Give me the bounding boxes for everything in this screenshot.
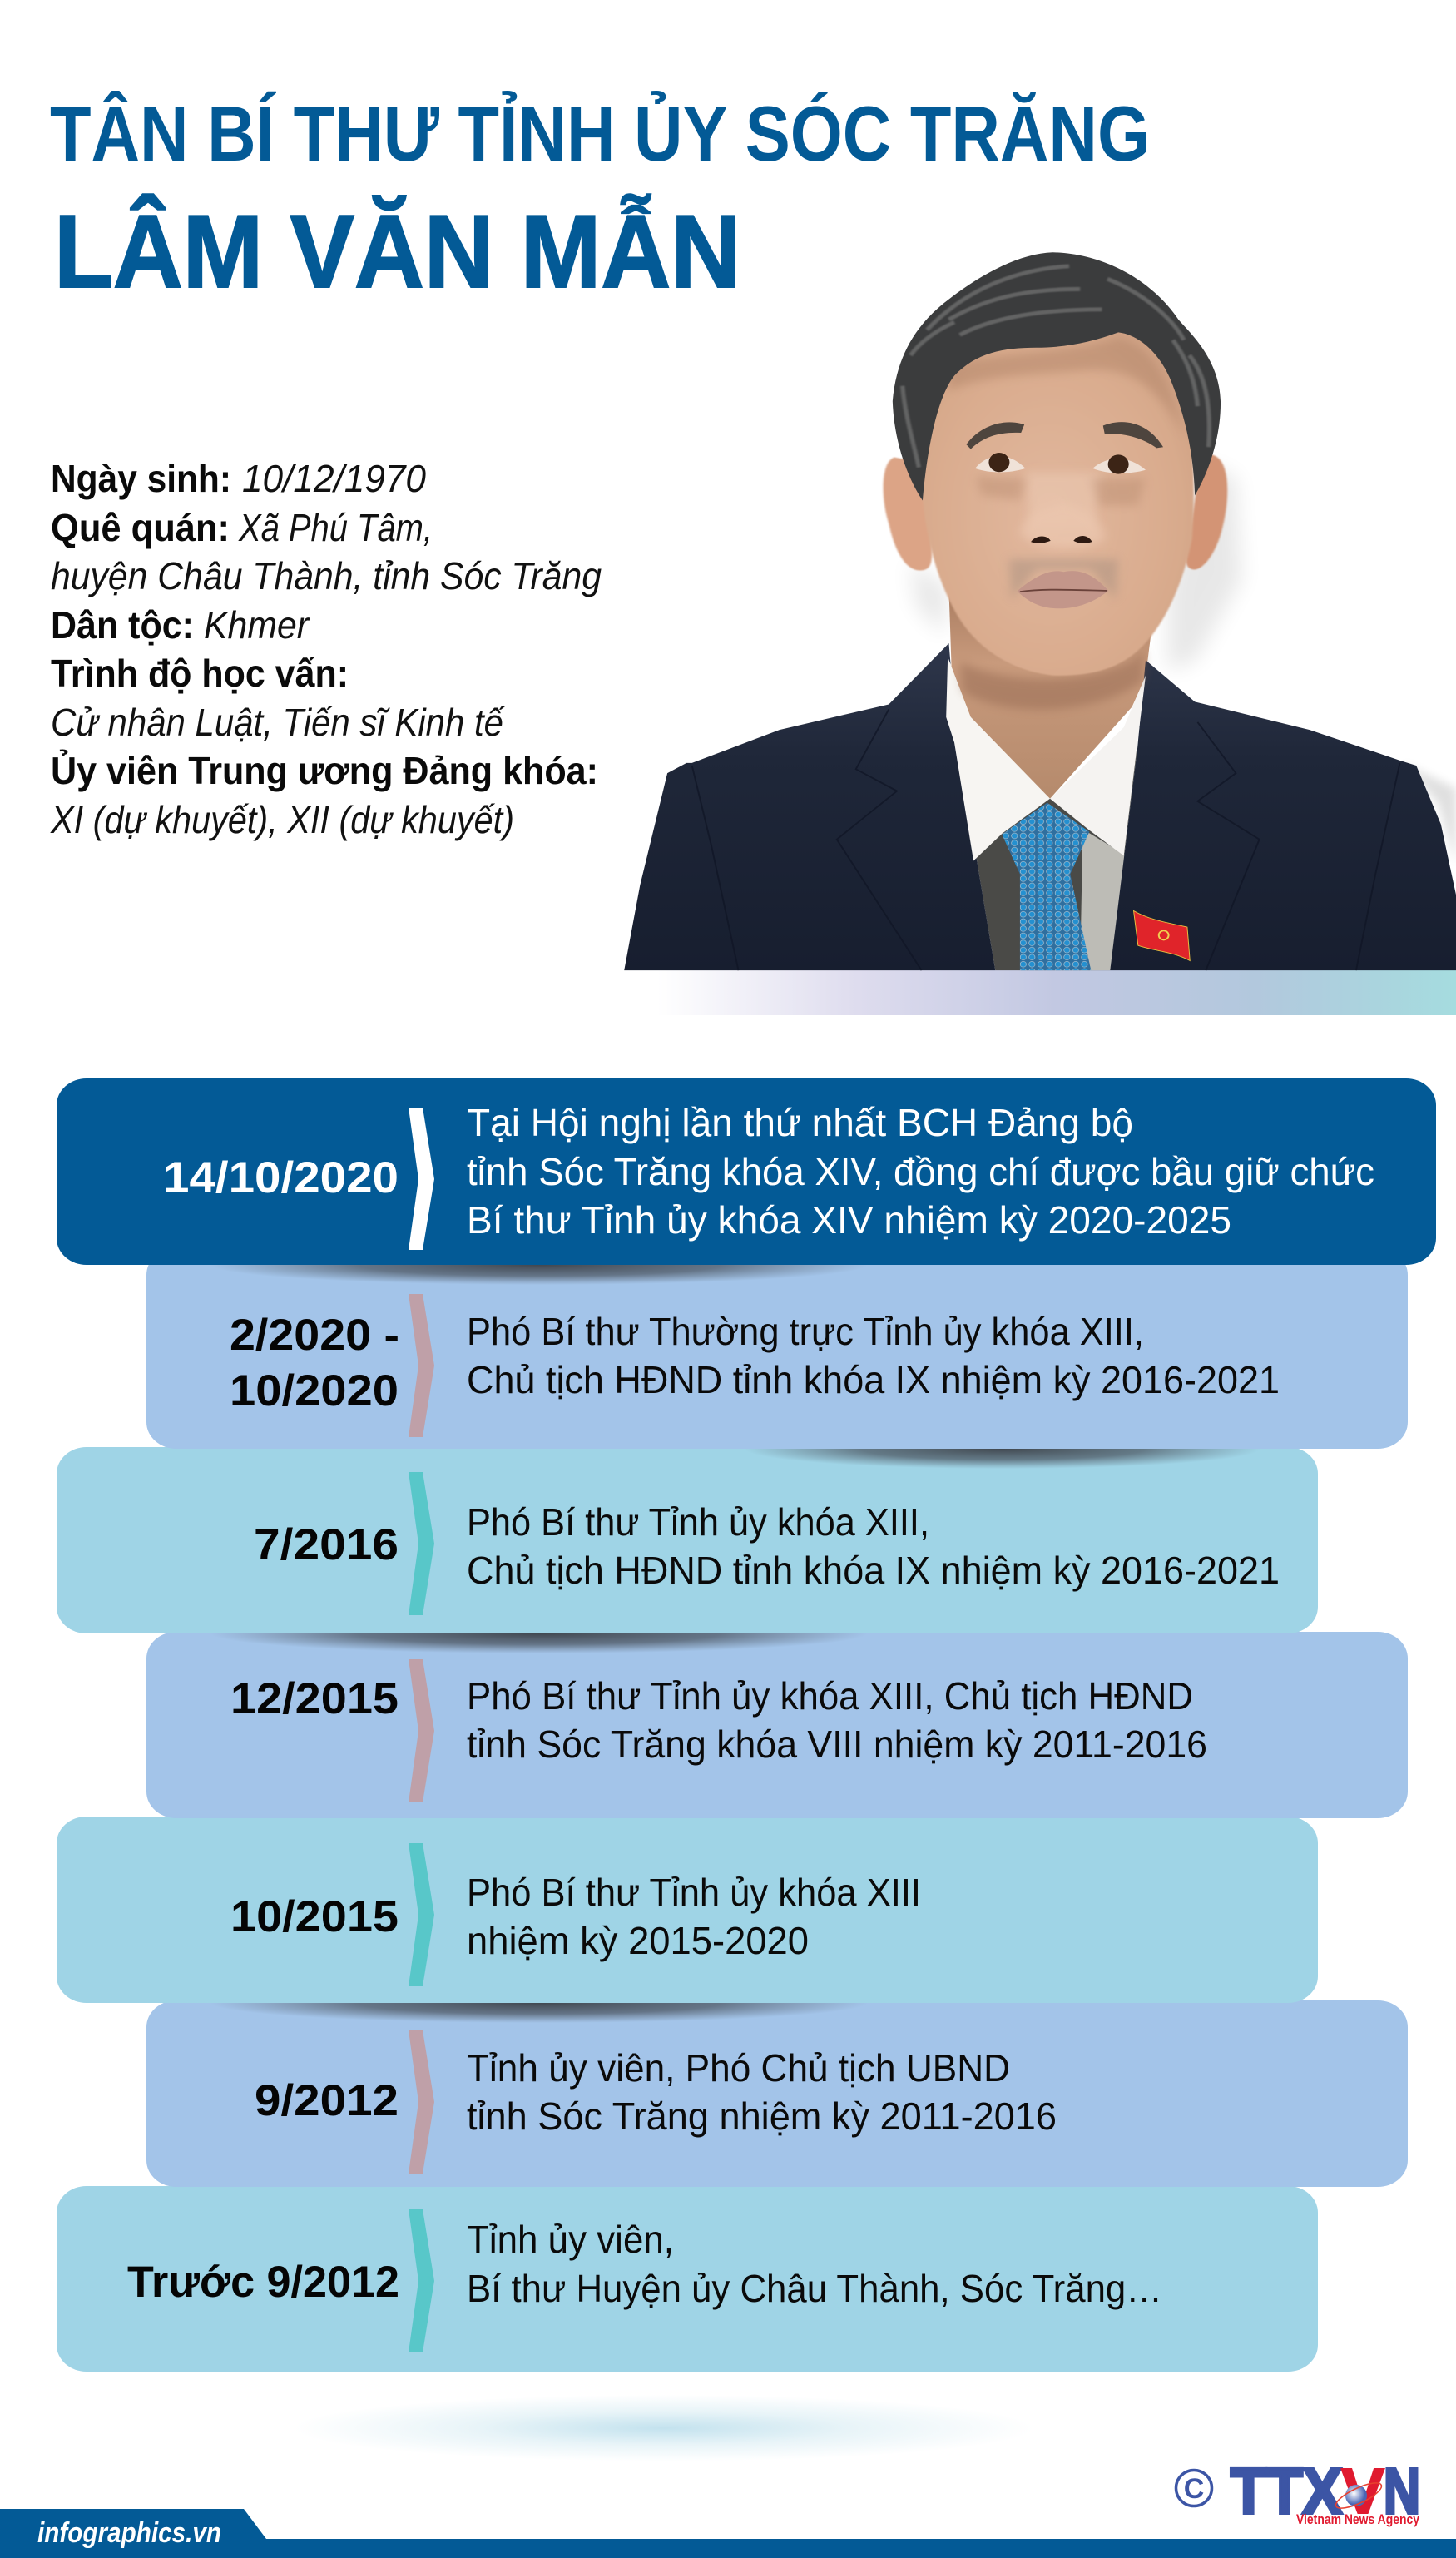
letter V: V (1341, 2456, 1384, 2527)
card 7: before 9/2012: Tỉnh ủy viên, (467, 2218, 674, 2261)
mouth line (1020, 590, 1107, 592)
home town (51, 506, 602, 597)
badge emblem (1159, 930, 1169, 939)
neck (948, 590, 1156, 799)
nostrils (1031, 536, 1092, 543)
card 1: 14/10/2020: Bí thư Tỉnh ủy khóa XIV nhiệm kỳ 2020-2025 (467, 1198, 1231, 1242)
right ear (1186, 454, 1227, 569)
central committee: XI (dự khuyết), XII (dự khuyết) (50, 798, 514, 841)
education (51, 652, 506, 744)
gradient strip under portrait (657, 970, 1456, 1015)
nose (1020, 503, 1105, 548)
central committee: Ủy viên Trung ương Đảng khóa: (51, 749, 598, 792)
card 5: 10/2015: nhiệm kỳ 2015-2020 (467, 1919, 809, 1962)
home town: Xã Phú Tâm, (238, 506, 433, 549)
face (923, 320, 1194, 676)
card 2: 2/2020 - 10/2020: Phó Bí thư Thường trực Tỉnh ủy khóa XIII, (467, 1310, 1144, 1353)
title (50, 89, 1150, 310)
portrait of Lâm Văn Mẫn (624, 252, 1456, 970)
card 2: 2/2020 - 10/2020: Chủ tịch HĐND tỉnh khóa IX nhiệm kỳ 2016-2021 (467, 1358, 1280, 1401)
ethnicity: Khmer (204, 603, 310, 647)
education: Trình độ học vấn: (51, 652, 349, 695)
left ear (883, 457, 932, 570)
birth date: Ngày sinh: (51, 457, 231, 500)
orbit (1333, 2478, 1384, 2513)
jacket lapel lines (692, 710, 1400, 970)
birth date: 10/12/1970 (242, 457, 426, 500)
card 3: 7/2016: Phó Bí thư Tỉnh ủy khóa XIII, (467, 1500, 929, 1544)
card 1: 14/10/2020: tỉnh Sóc Trăng khóa XIV, đồng chí được bầu giữ chức (467, 1150, 1374, 1193)
badge flag (1134, 910, 1190, 961)
card 7: before 9/2012: Trước 9/2012 (127, 2258, 399, 2307)
card 4: 12/2015: tỉnh Sóc Trăng khóa VIII nhiệm kỳ 2011-2016 (467, 1723, 1207, 1766)
card 6: 9/2012: 9/2012 (255, 2076, 399, 2125)
card 5: 10/2015: Phó Bí thư Tỉnh ủy khóa XIII (467, 1871, 921, 1914)
hair grey highlights (903, 266, 1209, 468)
footer bar (0, 2509, 1456, 2558)
central committee (50, 749, 598, 841)
birth date (51, 457, 426, 500)
card 4: 12/2015 (146, 1614, 1408, 1818)
copyright mark (1176, 2470, 1211, 2506)
logo: TTXVN (1176, 2456, 1420, 2527)
title line 1: TÂN BÍ THƯ TỈNH ỦY SÓC TRĂNG (50, 89, 1150, 177)
stubble shading (1009, 559, 1118, 600)
card 6: 9/2012: tỉnh Sóc Trăng nhiệm kỳ 2011-2016 (467, 2094, 1057, 2138)
shirt right side (1080, 830, 1125, 970)
forehead shade under hair (948, 338, 1184, 437)
ethnicity: Dân tộc: (51, 603, 194, 647)
shirt (957, 742, 1137, 970)
left iris (988, 453, 1009, 472)
collar right (1050, 676, 1146, 855)
card 3: 7/2016: 7/2016 (254, 1520, 399, 1569)
card 6: 9/2012: Tỉnh ủy viên, Phó Chủ tịch UBND (467, 2046, 1010, 2090)
portrait soft shadow (910, 463, 1241, 672)
personal information text block (50, 457, 602, 841)
necktie (1002, 803, 1091, 970)
left eye (975, 456, 1025, 473)
home town: Quê quán: (51, 506, 230, 549)
right eye (1092, 459, 1146, 473)
cheek shading (1025, 473, 1102, 528)
timeline stack (57, 1078, 1436, 2372)
card 1: 14/10/2020: 14/10/2020 (163, 1153, 399, 1202)
party badge (1134, 910, 1190, 961)
shoulder right shadow (1403, 763, 1456, 865)
card 4: 12/2015: 12/2015 (230, 1674, 399, 1723)
card 7: before 9/2012: Bí thư Huyện ủy Châu Thành, Sóc Trăng… (467, 2267, 1162, 2310)
face shadow on neck (960, 651, 1146, 710)
decorative glow under timeline (294, 2395, 1034, 2461)
card 3: 7/2016: Chủ tịch HĐND tỉnh khóa IX nhiệm kỳ 2016-2021 (467, 1549, 1280, 1592)
education: Cử nhân Luật, Tiến sĩ Kinh tế (51, 701, 506, 744)
card 2: 2/2020 - 10/2020 (146, 1245, 1408, 1449)
copyright mark: C (1184, 2473, 1204, 2505)
source url: infographics.vn (37, 2517, 221, 2549)
card 1: 14/10/2020 (57, 1078, 1436, 1265)
right iris (1108, 454, 1129, 474)
jacket (624, 643, 1456, 970)
collar left (946, 657, 1050, 860)
card 5: 10/2015 (57, 1817, 1318, 2003)
card 7: before 9/2012 (57, 2186, 1318, 2372)
agency name: Vietnam News Agency (1296, 2511, 1419, 2527)
bar and tab (0, 2509, 1456, 2558)
eyebrows (967, 422, 1163, 449)
ethnicity (51, 603, 310, 647)
title line 2: name: LÂM VĂN MẪN (54, 194, 740, 310)
hair (893, 252, 1221, 501)
card 4: 12/2015: Phó Bí thư Tỉnh ủy khóa XIII, Chủ tịch HĐND (467, 1674, 1193, 1718)
card 5: 10/2015: 10/2015 (230, 1892, 399, 1941)
lips (1018, 571, 1108, 608)
letters TTX: TTX (1231, 2456, 1342, 2527)
under-eye shading (976, 477, 1146, 506)
home town: huyện Châu Thành, tỉnh Sóc Trăng (51, 554, 602, 597)
card 1: 14/10/2020: Tại Hội nghị lần thứ nhất BCH Đảng bộ (467, 1101, 1133, 1144)
globe (1345, 2485, 1367, 2506)
card 2: 2/2020 - 10/2020: 2/2020 - (230, 1311, 399, 1360)
card 2: 2/2020 - 10/2020: 10/2020 (230, 1366, 399, 1415)
card 3: 7/2016 (57, 1429, 1318, 1633)
card 6: 9/2012 (146, 1983, 1408, 2187)
letter N: N (1384, 2456, 1420, 2527)
